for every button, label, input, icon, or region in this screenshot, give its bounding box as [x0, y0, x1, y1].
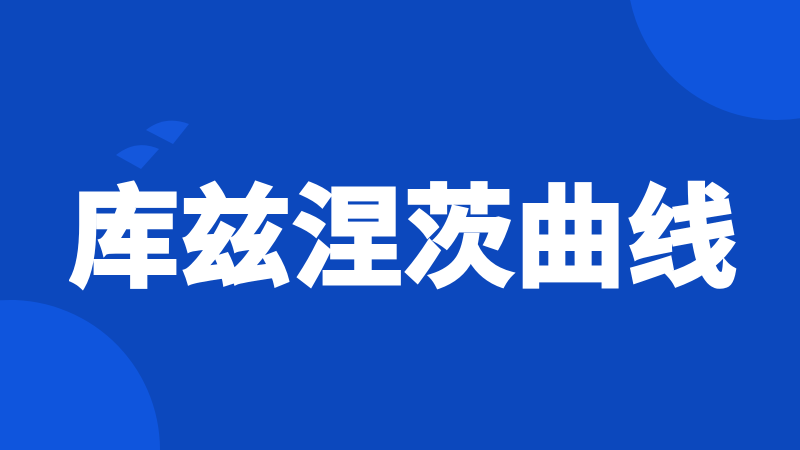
icon: logo wedges [116, 121, 189, 169]
bottom-left circle [0, 300, 160, 450]
top-right circle [630, 0, 800, 120]
title: 库兹涅茨曲线 [69, 178, 739, 301]
